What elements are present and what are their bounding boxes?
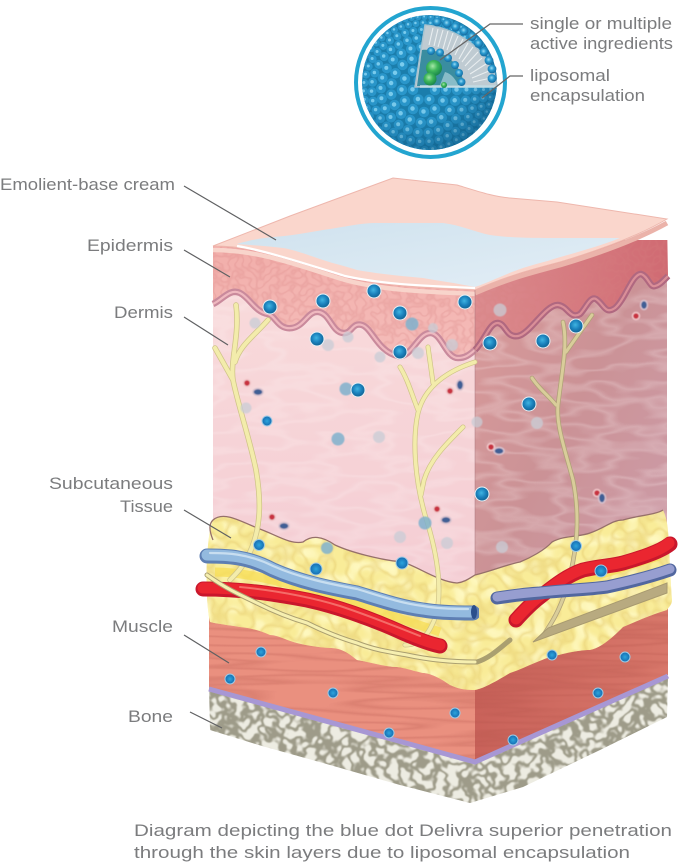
dermis left face <box>213 246 475 600</box>
dermis right face <box>475 220 667 600</box>
vertical front corner <box>474 290 476 575</box>
label: Emolient-base cream: Emolient-base cream <box>0 176 175 194</box>
label: Epidermis <box>87 237 230 277</box>
liposome sphere illustration <box>350 8 505 163</box>
beaded sphere surface <box>362 15 497 150</box>
caption: through the skin layers due to liposomal encapsulation <box>134 844 630 862</box>
subcutaneous fat <box>207 510 672 690</box>
faded dissolved particles <box>240 304 543 554</box>
caption <box>134 822 672 862</box>
epidermis left face <box>213 246 475 358</box>
sphere callout: active ingredients <box>440 15 673 60</box>
nerve: middle dermis <box>400 347 475 645</box>
top surface <box>213 178 667 290</box>
bone layer <box>209 676 668 803</box>
sphere callout: active ingredients: active ingredients <box>530 35 673 53</box>
label: Bone <box>128 708 222 728</box>
label: Emolient-base cream <box>0 176 276 240</box>
sphere callout: liposomal encapsulation <box>482 67 645 105</box>
periosteum band <box>209 676 668 762</box>
fat top outline <box>210 510 663 583</box>
saturated fat streaks around vessels <box>215 556 660 632</box>
label: Dermis <box>114 304 228 345</box>
label: Dermis: Dermis <box>114 304 173 322</box>
label: Muscle: Muscle <box>112 618 173 636</box>
artery right <box>516 543 670 620</box>
right lower nerve wedge <box>533 583 667 642</box>
basement membrane wave left <box>213 292 475 358</box>
label: Muscle <box>112 618 229 663</box>
vein right <box>497 569 670 598</box>
skin cross-section block <box>203 178 672 803</box>
basement membrane wave right <box>475 274 668 350</box>
label: Subcutaneous Tissue: Subcutaneous <box>49 475 173 493</box>
red and blue molecule pairs <box>244 300 648 530</box>
stratum corneum band right <box>475 223 667 293</box>
left front edge highlight <box>237 246 475 288</box>
sphere callout: liposomal encapsulation: encapsulation <box>530 87 645 105</box>
nerve: left dermis <box>215 305 268 580</box>
green active ingredients <box>424 60 447 88</box>
label: Epidermis: Epidermis <box>87 237 173 255</box>
small blue dots in deep layers <box>225 416 630 745</box>
vein left <box>207 553 473 613</box>
muscle layer <box>209 590 668 760</box>
label: Bone: Bone <box>128 708 173 726</box>
outer ring <box>356 8 505 157</box>
sphere callout: liposomal encapsulation: liposomal <box>530 67 610 85</box>
inner bead layer <box>427 47 466 86</box>
label: Subcutaneous Tissue: Tissue <box>120 498 173 516</box>
large blue liposome dots <box>263 284 583 501</box>
artery left <box>203 587 440 646</box>
epidermis right face <box>475 220 668 350</box>
caption: Diagram depicting the blue dot Delivra superior penetration <box>134 822 672 840</box>
cutaway wedge <box>415 18 497 88</box>
sphere callout: active ingredients: single or multiple <box>530 15 672 33</box>
stratum corneum band left <box>213 250 475 294</box>
nerve: right dermis <box>532 315 592 636</box>
vein cut end left <box>471 605 477 619</box>
emollient cream <box>237 223 620 287</box>
label: Subcutaneous Tissue <box>49 475 231 538</box>
lower nerve trunk left <box>207 575 510 662</box>
outer bead layer <box>433 18 496 83</box>
